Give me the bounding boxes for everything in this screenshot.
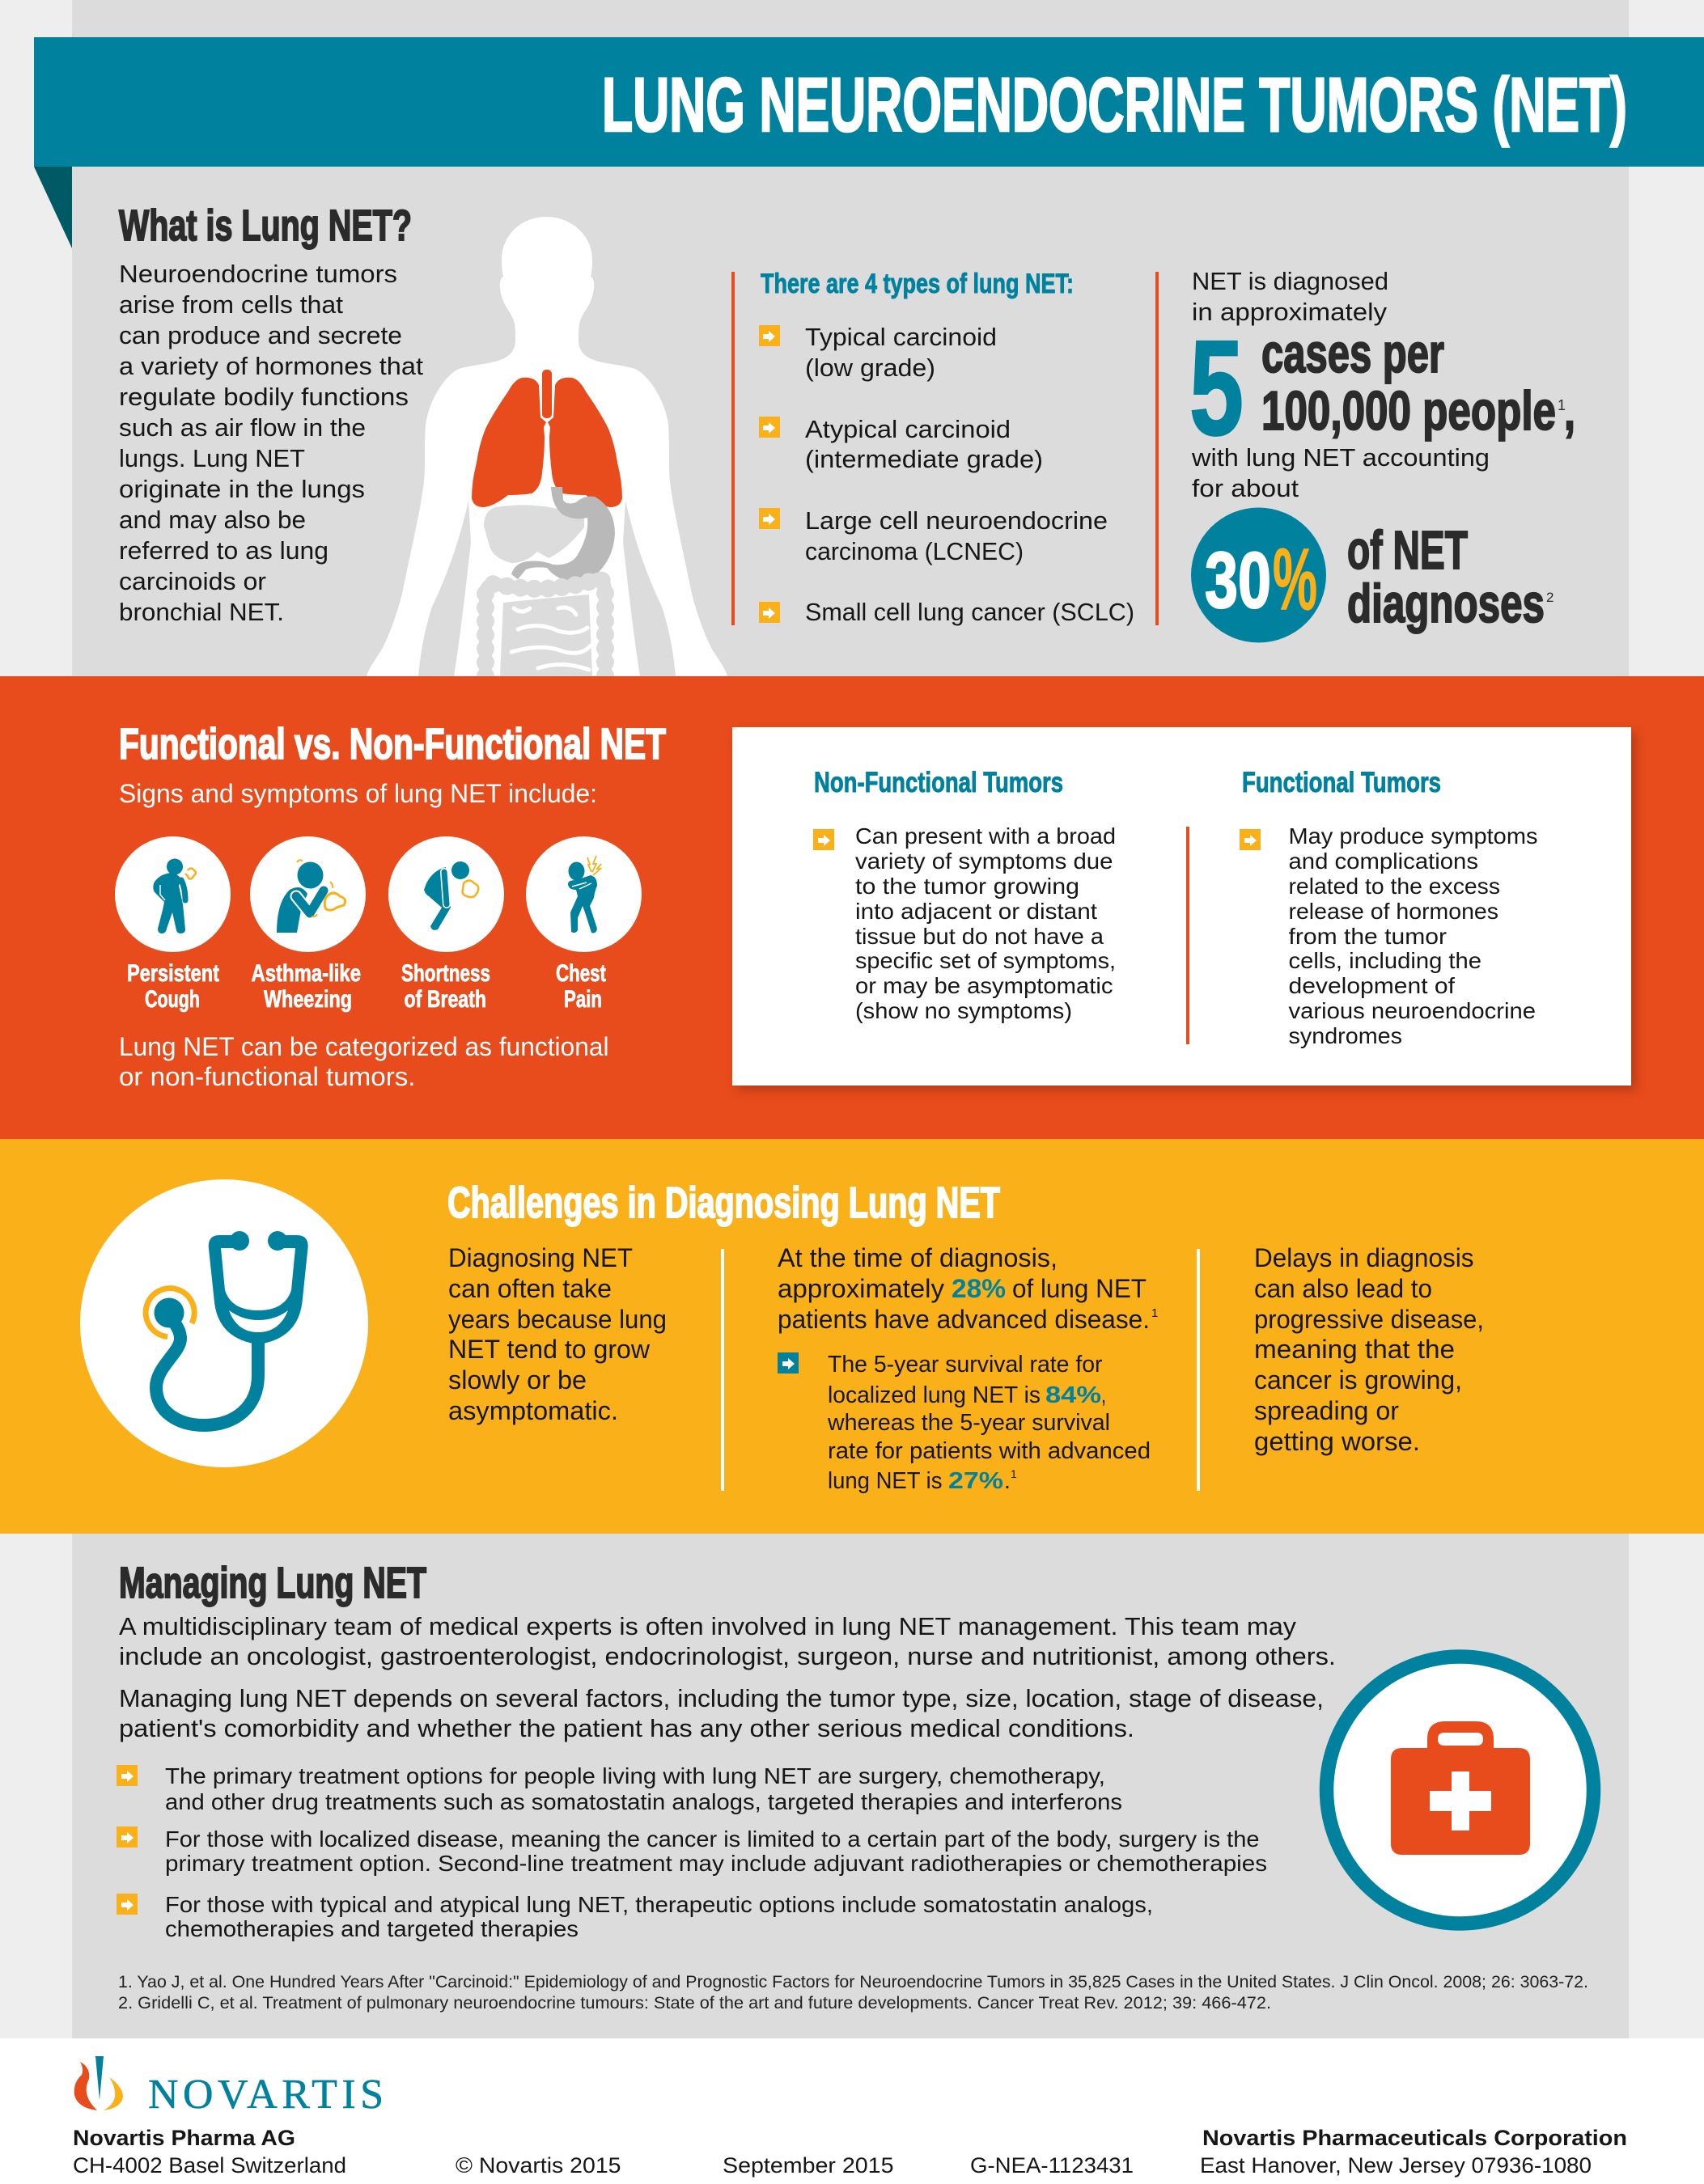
panel: challenges in diagnosing [0, 1139, 1704, 1534]
text: column 1: Diagnosing NET [448, 1243, 633, 1272]
text: non-functional description: tissue but do not have a [855, 924, 1104, 949]
text: Novartis Pharmaceuticals address: Novartis Pharmaceuticals Corporation [1202, 2126, 1627, 2150]
text: Novartis Pharma AG address [73, 2126, 346, 2178]
text: functional description: May produce symptoms [1288, 823, 1537, 849]
icon: bullet arrow [759, 417, 780, 438]
text: functional description [1288, 823, 1537, 1048]
text: column 1: NET tend to grow [448, 1335, 651, 1364]
text: non-functional description: (show no symptoms) [855, 998, 1072, 1023]
text block: definition: bronchial NET. [119, 598, 284, 626]
text: survival rates: rate for patients with advanced [828, 1438, 1151, 1464]
text: accounting [1191, 443, 1490, 502]
icon: bullet arrow [778, 1352, 799, 1373]
stat: 5 cases per 100,000: 5 [1189, 313, 1244, 463]
logo: Novartis: NOVARTIS [148, 2072, 384, 2118]
text: functional description: cells, including the [1288, 948, 1481, 973]
icon: body silhouette with lungs [367, 217, 727, 676]
text: non-functional description: variety of symptoms due [855, 849, 1113, 874]
icon: bullet arrow [759, 325, 780, 346]
text: non-functional description: or may be asymptomatic [855, 973, 1113, 998]
icon: bullet arrow [759, 602, 780, 623]
icon: chest pain [526, 836, 642, 952]
text: typical carcinoid [805, 323, 997, 382]
panel: what is lung NET [119, 201, 727, 676]
stat: 5 cases per 100,000: 100,000 people [1261, 380, 1556, 442]
text: diagnosed intro: in approximately [1192, 298, 1388, 326]
text: functional description: release of hormones [1288, 899, 1498, 924]
text: column 1 [448, 1243, 667, 1425]
text: column 1: slowly or be [448, 1365, 587, 1395]
text: column 2: 1 [1151, 1306, 1158, 1320]
text: treatment bullet 1: The primary treatment options for people living with lung NET are surgery, chemotherapy, [165, 1763, 1105, 1788]
text: Novartis Pharma AG address: Novartis Pharma AG [73, 2126, 295, 2150]
text: small cell: Small cell lung cancer (SCLC) [805, 598, 1134, 626]
stat: 30% of NET diagnoses: diagnoses [1347, 574, 1545, 634]
text: treatment bullet 3: For those with typical and atypical lung NET, therapeutic options include somatostatin analogs, [165, 1892, 1153, 1917]
icon: bullet arrow [813, 829, 834, 850]
text block: definition: can produce and secrete [119, 321, 402, 349]
text: survival rates: . [1004, 1468, 1011, 1494]
label: shortness of breath: Shortness [401, 960, 490, 987]
text: column 3: spreading or [1254, 1396, 1399, 1425]
icon: stethoscope [80, 1179, 368, 1467]
stat: 30% of NET diagnoses [1191, 508, 1554, 642]
text: atypical carcinoid: (intermediate grade) [805, 445, 1043, 473]
text: column 1: asymptomatic. [448, 1396, 618, 1425]
text: functional description: and complications [1288, 849, 1478, 874]
text: treatment bullet 2: primary treatment option. Second-line treatment may include adjuvant radiotherapies or chemotherapies [165, 1851, 1267, 1876]
text: survival rates: whereas the 5-year survival [827, 1410, 1110, 1436]
text: categorized [119, 1032, 608, 1091]
text: factors paragraph: patient's comorbidity and whether the patient has any other serious medical conditions. [119, 1714, 1134, 1742]
text: non-functional description [855, 823, 1116, 1023]
text: survival rates: localized lung NET is [828, 1382, 1041, 1408]
text: non-functional description: into adjacent or distant [855, 899, 1097, 924]
text: functional description: various neuroendocrine [1288, 998, 1536, 1023]
text: treatment bullet 2 [165, 1826, 1267, 1876]
text block: definition: and may also be [119, 506, 306, 534]
stat: 5 cases per 100,000 [1189, 313, 1575, 463]
text: date: September 2015 [723, 2153, 893, 2178]
text: column 3: can also lead to [1254, 1274, 1432, 1303]
text: document code: G-NEA-1123431 [970, 2153, 1134, 2178]
heading: functional tumors: Functional Tumors [1242, 767, 1441, 798]
heading: challenges: Challenges in Diagnosing Lung NET [447, 1179, 1000, 1227]
icon: bullet arrow [1240, 829, 1261, 850]
label: persistent cough [127, 960, 219, 1013]
heading: 4 types: There are 4 types of lung NET: [761, 269, 1074, 299]
label: asthma-like wheezing: Asthma-like [251, 960, 361, 987]
text: typical carcinoid: (low grade) [805, 353, 935, 382]
text: team paragraph: include an oncologist, gastroenterologist, endocrinologist, surgeon, nurse and nutritionist, among others. [119, 1642, 1336, 1670]
text: column 2: of lung NET [1012, 1274, 1147, 1303]
text: column 3: getting worse. [1254, 1427, 1420, 1456]
label: asthma-like wheezing: Wheezing [264, 986, 352, 1013]
heading: non-functional tumors: Non-Functional Tumors [814, 767, 1063, 798]
stat: 30% of NET diagnoses: of NET [1347, 520, 1468, 581]
stat: 5 cases per 100,000: 1 [1558, 397, 1566, 413]
intestines [485, 579, 605, 676]
label: chest pain [556, 960, 606, 1013]
text: survival rates: 84% [1045, 1382, 1101, 1408]
label: asthma-like wheezing [251, 960, 361, 1013]
text: signs and symptoms: Signs and symptoms of lung NET include: [119, 779, 597, 808]
text: treatment bullet 1: and other drug treatments such as somatostatin analogs, targeted therapies and interferons [165, 1789, 1122, 1814]
text: column 3: progressive disease, [1254, 1305, 1484, 1334]
label: chest pain: Chest [556, 960, 606, 987]
text: survival rates: lung NET is [828, 1468, 942, 1494]
text block: definition: such as air flow in the [119, 413, 366, 442]
text: team paragraph [119, 1612, 1336, 1670]
panel: statistics [1155, 267, 1575, 642]
text: large cell: Large cell neuroendocrine [805, 506, 1108, 535]
stat: 30% of NET diagnoses: 2 [1546, 590, 1554, 605]
text: large cell [805, 506, 1108, 565]
text: categorized: or non-functional tumors. [119, 1062, 416, 1091]
text: column 3: meaning that the [1254, 1335, 1455, 1364]
text: non-functional description: specific set of symptoms, [855, 948, 1116, 973]
text: column 3 [1254, 1243, 1484, 1456]
icon: asthma-like wheezing [250, 836, 366, 952]
text: atypical carcinoid: Atypical carcinoid [805, 415, 1011, 443]
text block: definition: a variety of hormones that [119, 352, 423, 380]
text: column 2: 28% [952, 1274, 1006, 1303]
icon: bullet arrow [117, 1765, 138, 1786]
panel: functional vs non-functional [0, 676, 1704, 1139]
text: atypical carcinoid [805, 415, 1043, 473]
panel: tumor comparison card [732, 727, 1636, 1090]
text: non-functional description: to the tumor growing [855, 874, 1079, 899]
icon: medical kit [1327, 1657, 1594, 1924]
label: chest pain: Pain [564, 986, 602, 1013]
label: shortness of breath: of Breath [405, 986, 486, 1013]
text: references [118, 1973, 1588, 2013]
icon: shortness of breath [388, 836, 504, 952]
text block: definition: lungs. Lung NET [119, 444, 305, 472]
icon: bullet arrow [759, 508, 780, 529]
text: factors paragraph [119, 1684, 1324, 1742]
text: column 3: Delays in diagnosis [1254, 1243, 1474, 1272]
text: typical carcinoid: Typical carcinoid [805, 323, 997, 351]
text: team paragraph: A multidisciplinary team of medical experts is often involved in lung NET management. This team may [119, 1612, 1297, 1640]
heading: what is lung NET: What is Lung NET? [119, 201, 412, 250]
stat: 5 cases per 100,000: , [1564, 380, 1575, 442]
text: survival rates: 27% [948, 1468, 1003, 1494]
text: column 2: At the time of diagnosis, [778, 1243, 1058, 1272]
stat: 30% of NET diagnoses: 30 [1205, 535, 1271, 624]
icon: bullet arrow [117, 1826, 138, 1848]
text block: definition: regulate bodily functions [119, 383, 409, 411]
text: non-functional description: Can present with a broad [855, 823, 1116, 849]
icon: bullet arrow [117, 1894, 138, 1915]
text: accounting: for about [1192, 474, 1299, 502]
text: treatment bullet 1 [165, 1763, 1122, 1814]
text: accounting: with lung NET accounting [1191, 443, 1490, 472]
heading: functional vs non-functional: Functional vs. Non-Functional NET [119, 720, 666, 768]
text: column 1: years because lung [448, 1305, 667, 1334]
footer [73, 2056, 1627, 2178]
panel: types of lung NET [731, 269, 1134, 626]
label: shortness of breath [401, 960, 490, 1013]
text: Novartis Pharmaceuticals address: East Hanover, New Jersey 07936-1080 [1200, 2153, 1592, 2178]
panel: header banner [34, 37, 1704, 248]
text: categorized: Lung NET can be categorized as functional [119, 1032, 608, 1061]
text: treatment bullet 3: chemotherapies and targeted therapies [165, 1916, 579, 1941]
icon: persistent cough [115, 836, 231, 952]
text: column 1: can often take [448, 1274, 612, 1303]
text: column 2: patients have advanced disease. [778, 1305, 1150, 1334]
text block: definition [119, 260, 423, 626]
text: Novartis Pharma AG address: CH-4002 Basel Switzerland [73, 2153, 346, 2178]
label: persistent cough: Persistent [127, 960, 219, 987]
text: functional description: development of [1288, 973, 1455, 998]
panel: managing lung NET [117, 1559, 1594, 2013]
text: treatment bullet 2: For those with localized disease, meaning the cancer is limited to a certain part of the body, surgery is the [165, 1826, 1259, 1852]
text: functional description: from the tumor [1288, 924, 1447, 949]
text block: definition: carcinoids or [119, 567, 266, 595]
heading: managing: Managing Lung NET [119, 1559, 426, 1607]
label: persistent cough: Cough [145, 986, 200, 1013]
text block: definition: referred to as lung [119, 536, 329, 565]
text: column 2 [778, 1243, 1158, 1494]
text: references: 2. Gridelli C, et al. Treatment of pulmonary neuroendocrine tumours: State of the art and future developments. Cancer Treat Rev. 2012; 39: 466-472. [118, 1994, 1271, 2013]
text: survival rates: 1 [1011, 1467, 1017, 1480]
text: large cell: carcinoma (LCNEC) [805, 537, 1024, 565]
text: Novartis Pharmaceuticals address [1200, 2126, 1627, 2178]
text block: definition: arise from cells that [119, 290, 343, 319]
stat: 5 cases per 100,000: cases per [1261, 323, 1444, 384]
text: functional description: syndromes [1288, 1023, 1402, 1048]
text: column 3: cancer is growing, [1254, 1365, 1462, 1395]
stat: 30% of NET diagnoses: % [1273, 530, 1317, 628]
text: references: 1. Yao J, et al. One Hundred Years After "Carcinoid:" Epidemiology of and Prognostic Factors for Neuroendocrine Tumors in 35,825 Cases in the United States. J Clin Oncol. 2008; 26: 3063-72. [118, 1973, 1588, 1991]
text block: definition: originate in the lungs [119, 475, 365, 503]
text: survival rates [827, 1352, 1151, 1494]
text: functional description: related to the excess [1288, 874, 1500, 899]
text: survival rates: , [1101, 1382, 1106, 1408]
lungs [472, 370, 622, 507]
logo: Novartis [74, 2056, 384, 2118]
text: factors paragraph: Managing lung NET depends on several factors, including the tumor type, size, location, stage of disease, [119, 1684, 1324, 1712]
text: copyright: © Novartis 2015 [456, 2153, 621, 2178]
text block: definition: Neuroendocrine tumors [119, 260, 397, 288]
text: diagnosed intro: NET is diagnosed [1192, 267, 1388, 295]
text: treatment bullet 3 [165, 1892, 1153, 1941]
text: column 2: approximately [778, 1274, 944, 1303]
text: diagnosed intro [1192, 267, 1388, 326]
text: survival rates: The 5-year survival rate for [828, 1352, 1103, 1378]
